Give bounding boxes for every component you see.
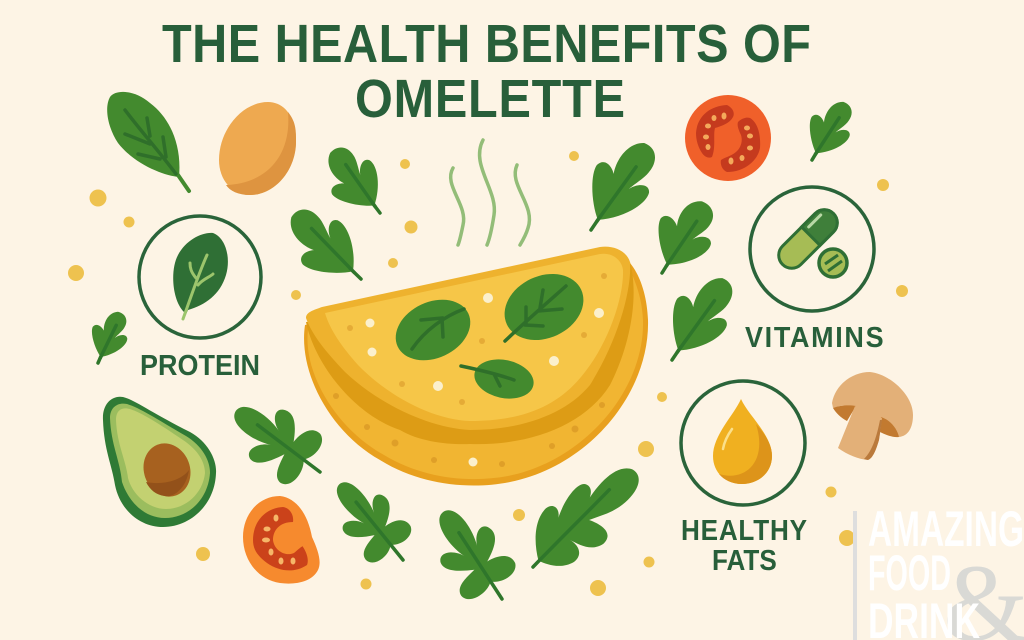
label: healthy fats (681, 514, 807, 576)
tablet (819, 249, 847, 277)
label: healthy fats: FATS (712, 544, 777, 576)
omelette (304, 247, 648, 486)
leaves scattered (80, 92, 863, 617)
oil drop (713, 399, 772, 484)
label: vitamins: VITAMINS (745, 321, 884, 353)
title: THE HEALTH BENEFITS OF (162, 13, 811, 74)
icon: spinach leaf top left (107, 92, 189, 191)
icon: tomato slice top (685, 95, 771, 181)
healthy fats circle icon (681, 381, 805, 505)
icon: tomato slice bottom (243, 496, 320, 584)
title: OMELETTE (355, 68, 625, 129)
label: protein: PROTEIN (140, 349, 260, 381)
steam (451, 140, 529, 245)
label: healthy fats: HEALTHY (681, 514, 807, 546)
icon: avocado (103, 397, 216, 527)
watermark: FOOD (868, 545, 951, 601)
spinach icon (173, 233, 228, 319)
title (162, 13, 811, 129)
decorative dots (68, 151, 908, 596)
watermark (853, 501, 1024, 640)
icon: mushroom (832, 372, 913, 460)
specks (366, 293, 604, 466)
vitamins circle icon (750, 187, 874, 311)
spinach on omelette (386, 262, 594, 404)
capsule (773, 204, 843, 274)
protein circle icon (139, 216, 261, 338)
icon: egg (219, 102, 296, 195)
